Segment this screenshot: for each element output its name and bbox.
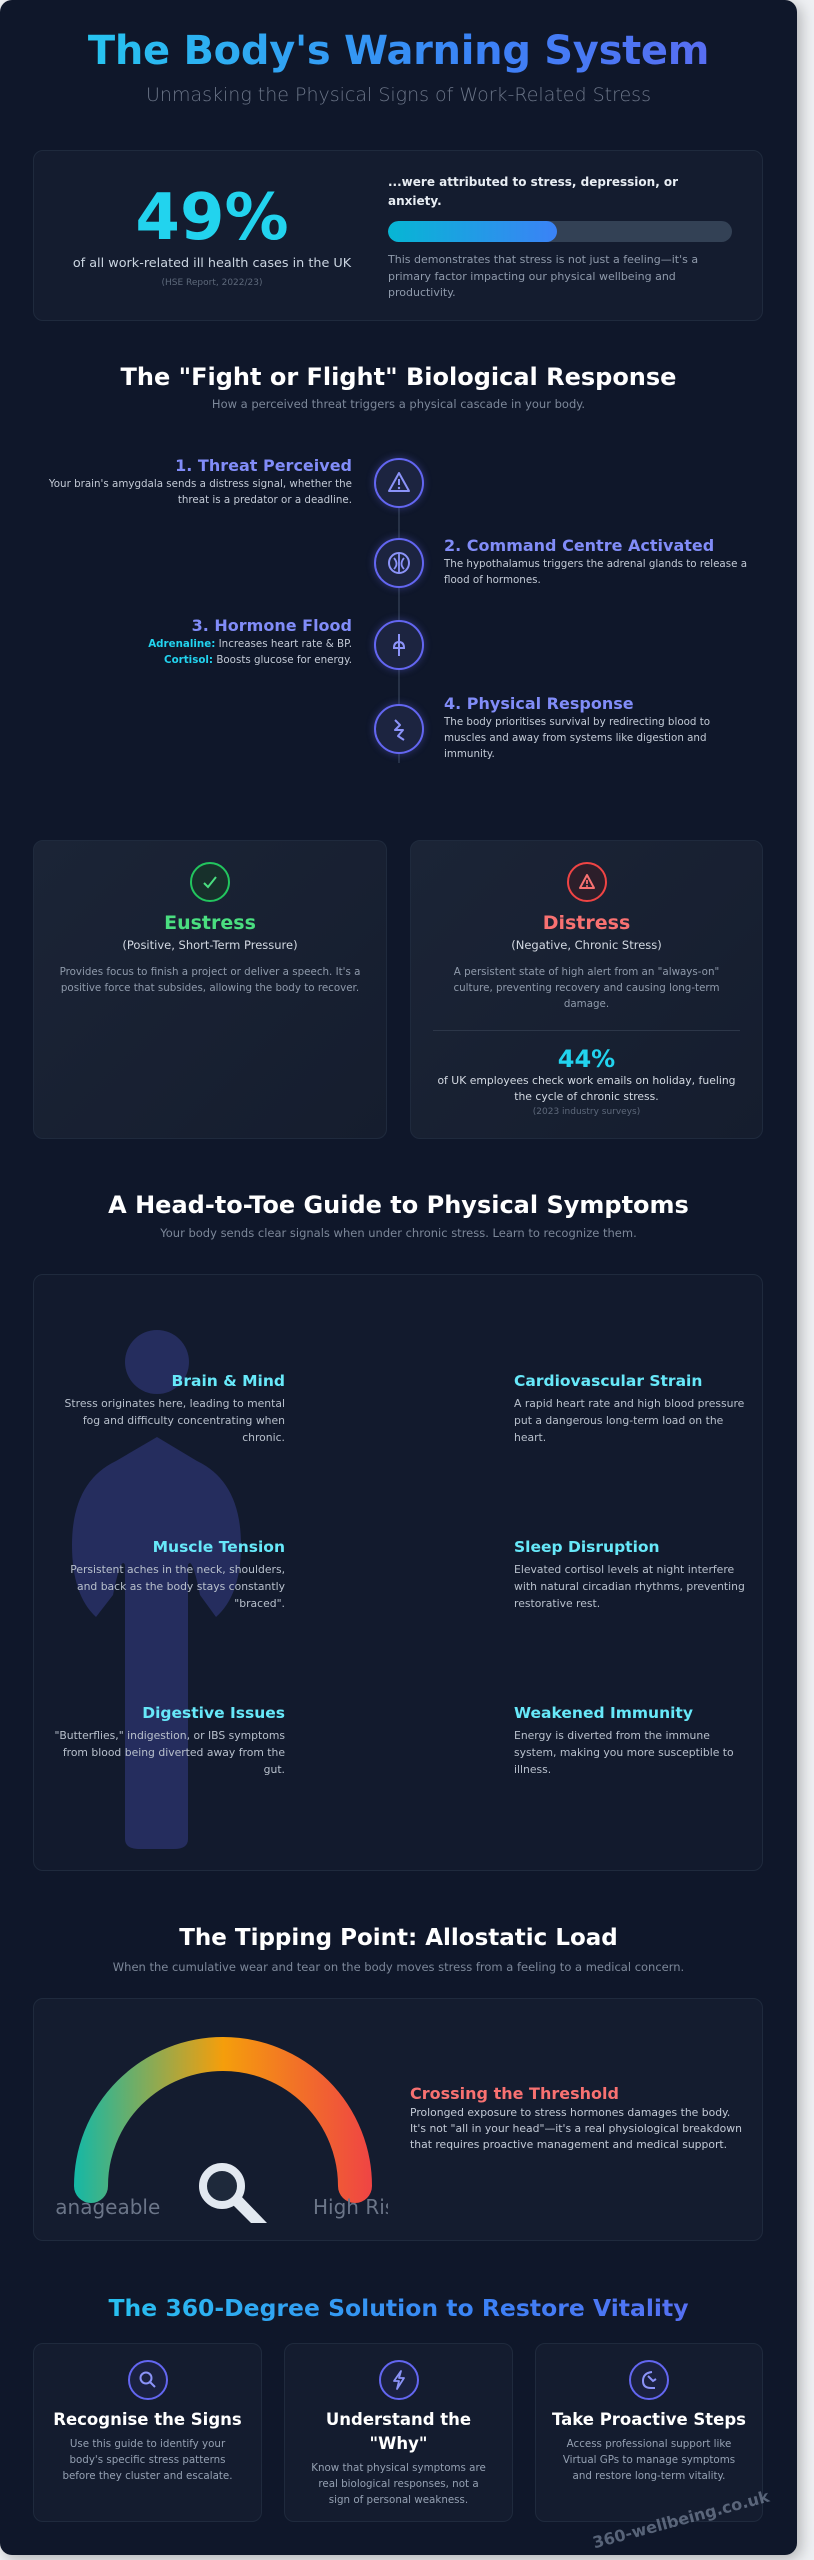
- title: The Body's Warning System: [88, 28, 709, 74]
- symptom: muscle: Muscle Tension: [153, 1538, 285, 1556]
- card: understand: Understand the "Why": [326, 2410, 471, 2453]
- title: [0, 25, 797, 77]
- symptom: sleep: Elevated cortisol levels at night interfere with natural circadian rhythms, preventing restorative rest.: [514, 1563, 745, 1610]
- big stat 49%: 49%: [135, 181, 289, 255]
- stat caption: of all work-related ill health cases in the UK: [73, 256, 351, 271]
- step 1: [48, 456, 352, 506]
- icon: warning: [374, 458, 424, 508]
- panel: distress: Distress: [543, 912, 630, 934]
- heading: 360 solution: The 360-Degree Solution to Restore Vitality: [108, 2294, 689, 2322]
- symptom: cardiovascular: [514, 1372, 744, 1444]
- step 3: 3. Hormone Flood: [192, 616, 352, 635]
- step 4: The body prioritises survival by redirecting blood to muscles and away from systems like digestion and immunity.: [444, 716, 710, 760]
- symptom: cardiovascular: A rapid heart rate and high blood pressure put a dangerous long-term load on the heart.: [514, 1397, 744, 1444]
- stat caption: [73, 256, 352, 288]
- progress bar: [388, 221, 732, 242]
- step 1: 1. Threat Perceived: [175, 456, 352, 475]
- icon: care: [629, 2360, 669, 2400]
- symptom: digestive: "Butterflies," indigestion, or IBS symptoms from blood being diverted away from the gut.: [54, 1729, 285, 1776]
- panel: distress: of UK employees check work emails on holiday, fueling the cycle of chronic stress.: [437, 1074, 736, 1103]
- heading: head-to-toe: A Head-to-Toe Guide to Physical Symptoms: [108, 1191, 689, 1219]
- card: understand: Know that physical symptoms are real biological responses, not a sign of personal weakness.: [311, 2462, 486, 2506]
- panel: distress: A persistent state of high alert from an "always-on" culture, preventing recovery and causing long-term damage.: [454, 966, 720, 1010]
- card: proactive: Access professional support like Virtual GPs to manage symptoms and restore long-term vitality.: [563, 2438, 735, 2482]
- symptom: immunity: Weakened Immunity: [514, 1704, 693, 1722]
- icon: lightning: [374, 704, 424, 754]
- gauge chart: [56, 2037, 388, 2223]
- icon: bolt: [378, 2360, 418, 2400]
- heading: tipping point: The Tipping Point: Allostatic Load: [179, 1925, 618, 1951]
- step 1: Your brain's amygdala sends a distress signal, whether the threat is a predator or a deadline.: [49, 478, 352, 506]
- heading: 360 solution: [0, 2292, 797, 2324]
- icon: brain: [374, 538, 424, 588]
- panel: distress: [410, 840, 763, 1139]
- icon: hormone: [374, 620, 424, 670]
- panel: eustress: [33, 840, 387, 1139]
- card: recognise: Recognise the Signs: [53, 2410, 242, 2429]
- panel: symptoms: [33, 1274, 763, 1871]
- step 2: 2. Command Centre Activated: [444, 536, 714, 555]
- timeline: [48, 454, 747, 763]
- heading: fight or flight: The "Fight or Flight" Biological Response: [121, 363, 676, 391]
- panel: key statistic: [33, 150, 763, 321]
- subheading: When the cumulative wear and tear on the body moves stress from a feeling to a medical concern.: [113, 1960, 684, 1974]
- symptom: immunity: Energy is diverted from the immune system, making you more susceptible to illness.: [514, 1729, 734, 1776]
- symptom: digestive: [54, 1704, 285, 1776]
- stat caption: (HSE Report, 2022/23): [162, 278, 262, 288]
- symptom: immunity: [514, 1704, 734, 1776]
- bar explanation: This demonstrates that stress is not just a feeling—it's a primary factor impacting our physical wellbeing and productivity.: [388, 253, 698, 299]
- symptom: digestive: Digestive Issues: [142, 1704, 285, 1722]
- step 2: [444, 536, 747, 586]
- gauge needle: [203, 2167, 267, 2223]
- panel: eustress: Eustress: [164, 912, 256, 934]
- card: proactive: Take Proactive Steps: [552, 2410, 746, 2429]
- subheading: How a perceived threat triggers a physical cascade in your body.: [212, 397, 585, 411]
- stat 44%: 44%: [558, 1045, 615, 1073]
- card: understand: [284, 2343, 513, 2522]
- step 2: The hypothalamus triggers the adrenal glands to release a flood of hormones.: [444, 558, 747, 586]
- symptom: cardiovascular: Cardiovascular Strain: [514, 1372, 702, 1390]
- card: proactive: [535, 2343, 763, 2522]
- symptom: brain: Stress originates here, leading to mental fog and difficulty concentrating when chronic.: [65, 1397, 285, 1444]
- threshold text: [410, 2084, 742, 2151]
- panel: allostatic load: [33, 1998, 763, 2241]
- step 3: Cortisol: Boosts glucose for energy.: [164, 654, 352, 666]
- symptom: muscle: [70, 1538, 285, 1610]
- step 3: [148, 616, 352, 666]
- body silhouette: [72, 1330, 241, 1849]
- symptom: brain: Brain & Mind: [172, 1372, 285, 1390]
- panel: eustress: (Positive, Short-Term Pressure): [122, 938, 298, 952]
- threshold text: Crossing the Threshold: [410, 2084, 619, 2103]
- subheading: Your body sends clear signals when under chronic stress. Learn to recognize them.: [160, 1226, 637, 1240]
- watermark: 360-wellbeing.co.uk: [591, 2487, 771, 2552]
- step 3: Adrenaline: Increases heart rate & BP.: [148, 638, 352, 650]
- symptom: sleep: [514, 1538, 745, 1610]
- panel: distress: (2023 industry surveys): [533, 1107, 640, 1117]
- subtitle: Unmasking the Physical Signs of Work-Related Stress: [146, 84, 651, 106]
- symptom: sleep: Sleep Disruption: [514, 1538, 660, 1556]
- card: recognise: Use this guide to identify your body's specific stress patterns before they cluster and escalate.: [62, 2438, 233, 2482]
- step 4: [444, 694, 710, 760]
- icon: search: [128, 2360, 168, 2400]
- panel: eustress: Provides focus to finish a project or deliver a speech. It's a positive force that subsides, allowing the body to recover.: [60, 966, 360, 994]
- symptom: muscle: Persistent aches in the neck, shoulders, and back as the body stays constantly "braced".: [70, 1563, 285, 1610]
- icon: warning red: [566, 862, 606, 902]
- icon: check: [190, 862, 230, 902]
- step 4: 4. Physical Response: [444, 694, 634, 713]
- attribution text: ...were attributed to stress, depression, or anxiety.: [388, 175, 678, 208]
- symptom: brain: [65, 1372, 285, 1444]
- panel: distress: (Negative, Chronic Stress): [511, 938, 662, 952]
- card: recognise: [33, 2343, 262, 2522]
- threshold text: Prolonged exposure to stress hormones damages the body. It's not "all in your head"—it's a real physiological breakdown that requires proactive management and medical support.: [410, 2106, 742, 2151]
